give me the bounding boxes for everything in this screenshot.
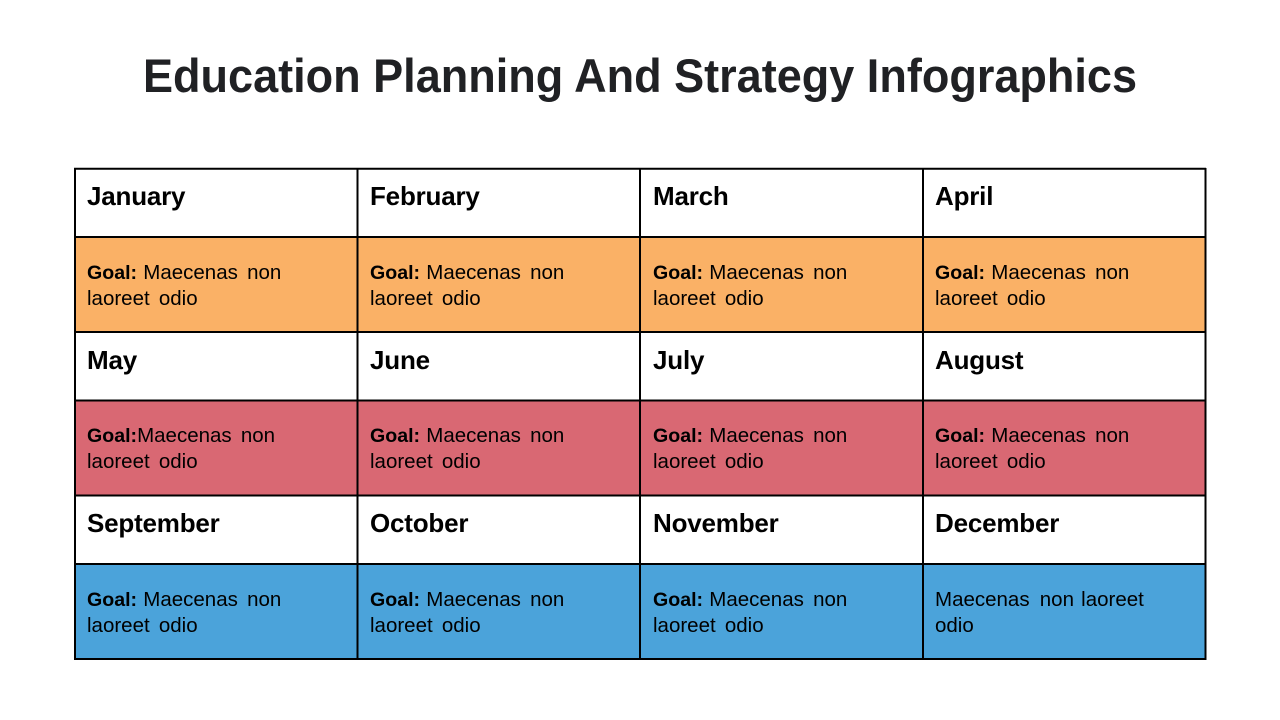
month: December: December bbox=[935, 508, 1059, 538]
month: September: September bbox=[87, 508, 220, 538]
goal: October bbox=[358, 564, 641, 659]
goal: July: laoreet odio bbox=[653, 450, 764, 473]
goal: May: laoreet odio bbox=[87, 450, 198, 473]
goal: September: Goal: Maecenas non bbox=[87, 588, 281, 611]
goal: May bbox=[75, 400, 358, 495]
goal: March bbox=[641, 237, 923, 332]
month: March: March bbox=[653, 181, 729, 211]
goal: February: Goal: Maecenas non bbox=[370, 261, 564, 284]
month: April: April bbox=[935, 181, 993, 211]
goal: October: laoreet odio bbox=[370, 614, 481, 637]
month: June: June bbox=[370, 345, 430, 375]
goal: October: Goal: Maecenas non bbox=[370, 588, 564, 611]
month: July: July bbox=[653, 345, 704, 375]
title: Education Planning And Strategy Infographics bbox=[143, 49, 1137, 102]
goal: August: laoreet odio bbox=[935, 450, 1046, 473]
goal: August bbox=[923, 400, 1206, 495]
goal: February: laoreet odio bbox=[370, 287, 481, 310]
goal: April: laoreet odio bbox=[935, 287, 1046, 310]
goal: November bbox=[641, 564, 923, 659]
month: November: November bbox=[653, 508, 779, 538]
goal: January: Goal: Maecenas non bbox=[87, 261, 281, 284]
month: October: October bbox=[370, 508, 468, 538]
month: May: May bbox=[87, 345, 137, 375]
goal: November: laoreet odio bbox=[653, 614, 764, 637]
goal: November: Goal: Maecenas non bbox=[653, 588, 847, 611]
goal: June: laoreet odio bbox=[370, 450, 481, 473]
goal: April bbox=[923, 237, 1206, 332]
goal: September bbox=[75, 564, 358, 659]
goal: September: laoreet odio bbox=[87, 614, 198, 637]
month: February: February bbox=[370, 181, 480, 211]
goal: December: odio bbox=[935, 614, 974, 637]
goal: August: Goal: Maecenas non bbox=[935, 424, 1129, 447]
goal: January bbox=[75, 237, 358, 332]
goal: February bbox=[358, 237, 641, 332]
goal: April: Goal: Maecenas non bbox=[935, 261, 1129, 284]
goal: July bbox=[641, 400, 923, 495]
month: January: January bbox=[87, 181, 185, 211]
month: August: August bbox=[935, 345, 1023, 375]
goal: December bbox=[923, 564, 1206, 659]
goal: June: Goal: Maecenas non bbox=[370, 424, 564, 447]
goal: March: Goal: Maecenas non bbox=[653, 261, 847, 284]
goal: July: Goal: Maecenas non bbox=[653, 424, 847, 447]
goal: May: Goal:Maecenas non bbox=[87, 424, 275, 447]
goal: December: Maecenas non laoreet bbox=[935, 588, 1144, 611]
goal: March: laoreet odio bbox=[653, 287, 764, 310]
goal: January: laoreet odio bbox=[87, 287, 198, 310]
goal: June bbox=[358, 400, 641, 495]
